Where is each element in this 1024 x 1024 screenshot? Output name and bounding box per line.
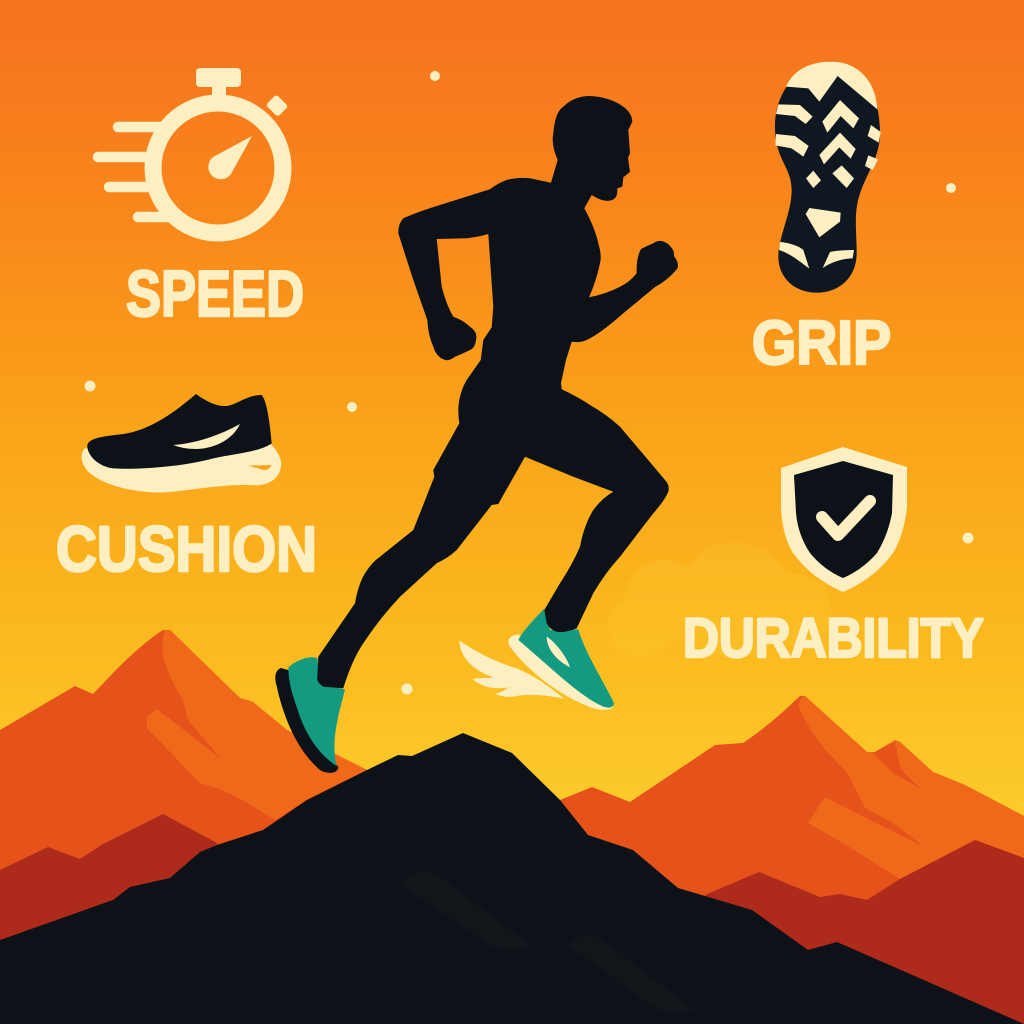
decorative cloud behind durability bbox=[608, 542, 831, 658]
mountains: right orange range bbox=[560, 696, 1024, 1024]
left running shoe bbox=[275, 657, 345, 773]
icon: shield with check bbox=[781, 447, 907, 592]
runner silhouette bbox=[317, 96, 678, 688]
mountains: left orange range bbox=[0, 630, 367, 960]
label: durability: DURABILITY bbox=[683, 606, 984, 669]
label: grip: GRIP bbox=[752, 309, 891, 378]
background dots bbox=[84, 71, 974, 694]
label: cushion: CUSHION bbox=[56, 513, 317, 585]
right running shoe with wing bbox=[459, 609, 614, 710]
foreground black mountain bbox=[0, 733, 1024, 1024]
icon: cushioned shoe bbox=[82, 394, 281, 493]
icon: shoe sole bbox=[775, 62, 881, 293]
label: speed: SPEED bbox=[126, 257, 304, 330]
icon: stopwatch bbox=[98, 68, 288, 233]
icon: wing bbox=[459, 641, 564, 699]
